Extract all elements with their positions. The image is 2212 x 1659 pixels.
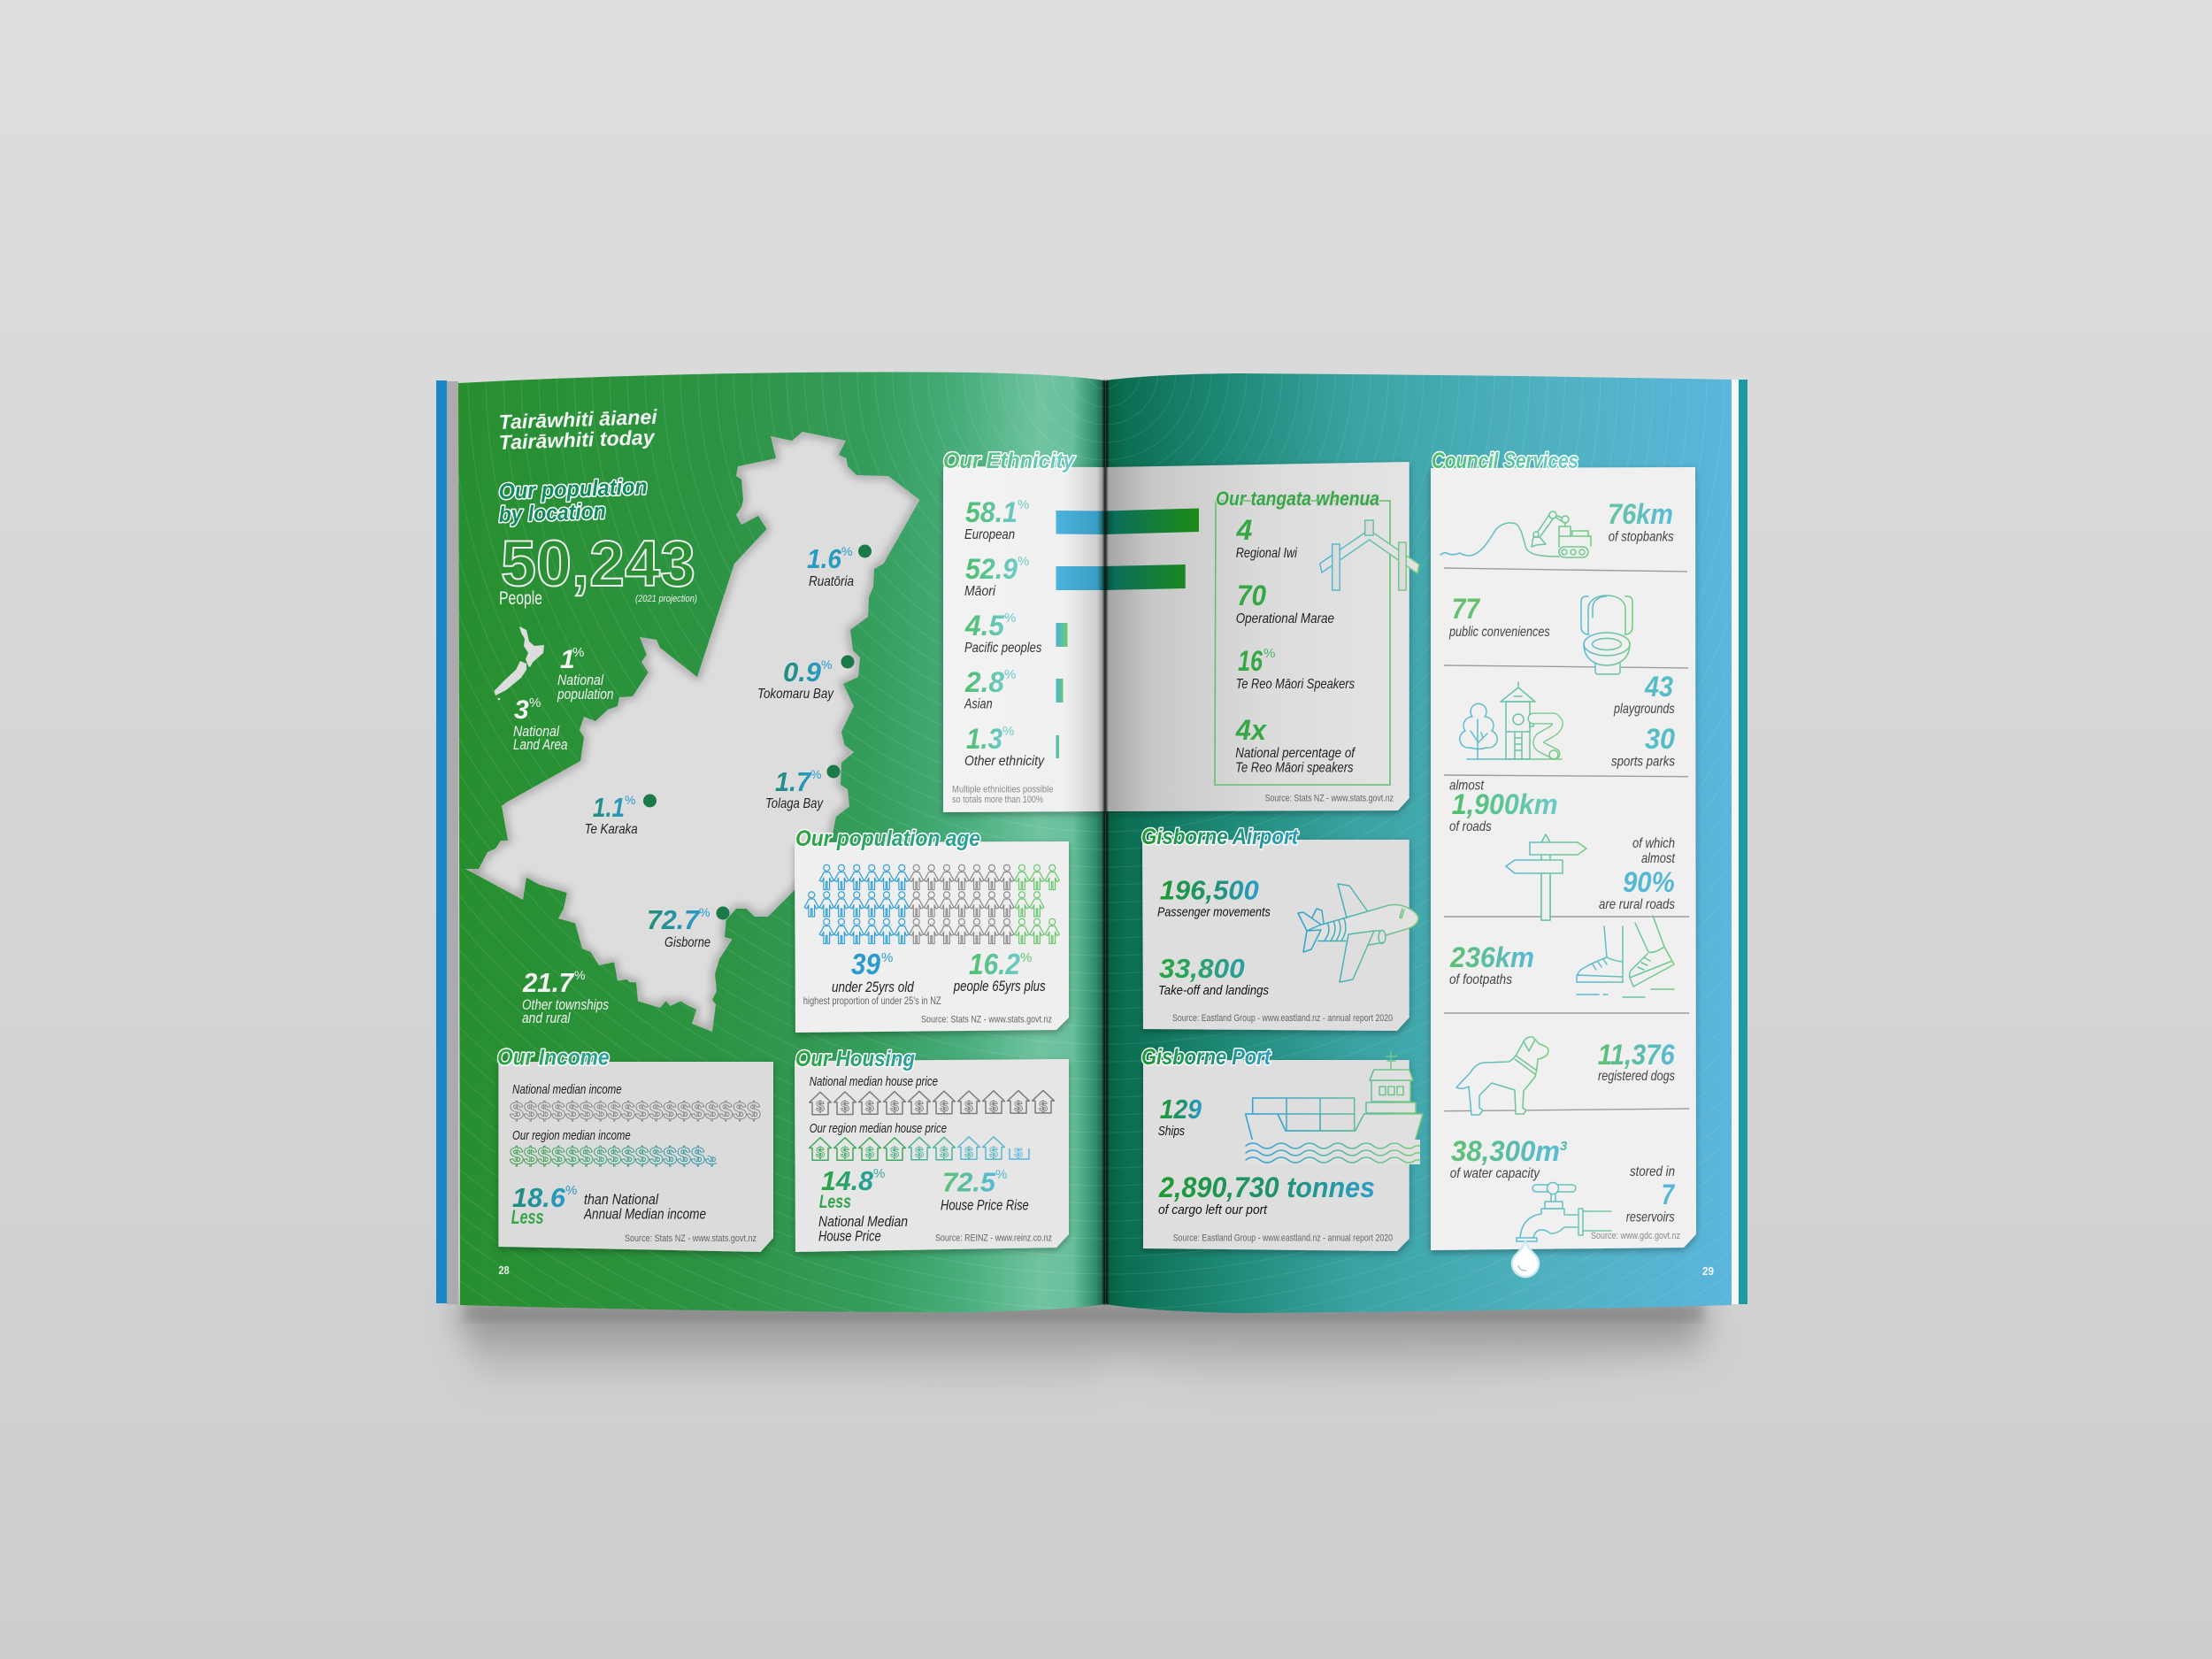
stat: registered dogs: 11,376	[1598, 1039, 1675, 1071]
stat: 4x national: Te Reo Māori speakers	[1235, 761, 1354, 776]
icon: tap	[1517, 1182, 1611, 1241]
source: Source: Stats NZ - www.stats.govt.nz	[625, 1233, 757, 1244]
icon: shoes	[1577, 916, 1674, 997]
location: Gisborne: %	[699, 905, 710, 919]
stat: 39%: 39	[851, 948, 881, 980]
stat: stopbanks: 76km	[1608, 498, 1673, 530]
people pictogram	[804, 864, 1059, 944]
stat: roads: 1,900km	[1452, 788, 1558, 820]
stat: other townships	[522, 967, 609, 1026]
icon: excavator and stopbank	[1440, 511, 1591, 557]
icon: water drop	[1512, 1241, 1539, 1277]
stat: other townships: and rural	[522, 1010, 571, 1026]
stat: 4 iwi: Regional Iwi	[1236, 546, 1297, 561]
heading: Our tangata whenua	[1216, 488, 1379, 510]
stat: 4x national	[1235, 714, 1356, 776]
stat: 4x national: National percentage of	[1235, 746, 1356, 761]
stat: sports parks	[1611, 723, 1675, 770]
stat: 18.6% less: %	[565, 1183, 577, 1198]
region median income	[510, 1130, 717, 1166]
stat: cargo: of cargo left our port	[1158, 1202, 1268, 1217]
location: Tolaga Bay	[765, 764, 841, 811]
stat: cargo	[1158, 1171, 1375, 1217]
region median house price: Our region median house price	[810, 1122, 947, 1136]
stat: 16.2%: 16.2	[969, 948, 1021, 980]
stat: 18.6% less: Less	[511, 1206, 544, 1228]
location: Gisborne	[647, 904, 729, 950]
stat: water capacity: of water capacity	[1450, 1166, 1540, 1181]
stat: public conveniences: public conveniences	[1448, 625, 1550, 640]
row: Pacific peoples 4.5%: 4.5	[964, 610, 1005, 641]
stat: water capacity: 3	[1560, 1139, 1568, 1154]
stat: 70 marae	[1236, 580, 1334, 626]
stat: passenger movements: 196,500	[1160, 875, 1259, 906]
frame	[1215, 501, 1390, 785]
stat: reservoirs: reservoirs	[1626, 1210, 1675, 1225]
row: European 58.1%: %	[1018, 497, 1029, 512]
national median house price: $$$$$$$$$$	[816, 1098, 1048, 1115]
source: Source: Stats NZ - www.stats.govt.nz	[921, 1015, 1052, 1025]
stat: playgrounds: 43	[1644, 671, 1673, 703]
stat: roads	[1449, 779, 1558, 834]
stat: reservoirs	[1626, 1164, 1676, 1225]
stat: 72.5% rise: 72.5	[942, 1167, 996, 1198]
heading: Our Housing	[795, 1047, 915, 1071]
stat: 72.5% rise: %	[995, 1167, 1007, 1182]
location: Te Karaka: %	[625, 793, 635, 807]
national median house price: National median house price	[810, 1075, 938, 1089]
stat: 39%: under 25yrs old	[832, 979, 914, 995]
stat: rural roads: are rural roads	[1599, 897, 1675, 912]
national median income: National median income	[512, 1083, 622, 1097]
location: Ruatōria	[807, 543, 872, 589]
row: Māori 52.9%: %	[1018, 554, 1029, 569]
stat: 16% speakers: %	[1263, 646, 1275, 661]
stat: 14.8% less: %	[873, 1166, 885, 1181]
left page background	[458, 372, 1105, 1312]
stat: footpaths: 236km	[1449, 941, 1534, 973]
location: Ruatōria: 1.6	[807, 543, 842, 574]
region median house price: $$$$$$$$	[816, 1144, 998, 1161]
source: Source: Eastland Group - www.eastland.nz - annual report 2020	[1173, 1233, 1393, 1244]
stat: 14.8% less: 14.8	[821, 1165, 874, 1196]
row: Māori 52.9%	[964, 553, 1186, 599]
stat: stopbanks: of stopbanks	[1609, 530, 1674, 545]
stat: 1% national population: population	[557, 686, 614, 703]
stat: footpaths: of footpaths	[1449, 972, 1512, 987]
stat: reservoirs: 7	[1662, 1179, 1676, 1210]
icon: New Zealand	[494, 626, 544, 700]
heading: Tairāwhiti today: Tairāwhiti āianei	[498, 405, 658, 434]
stat: footpaths	[1449, 941, 1534, 987]
heading: Council Services	[1432, 449, 1578, 473]
stat: 70 marae: 70	[1237, 580, 1266, 611]
stat: 3% national land area: Land Area	[513, 736, 568, 753]
source: Source: www.gdc.govt.nz	[1591, 1231, 1680, 1241]
region median income: Our region median income	[512, 1129, 631, 1143]
stat: passenger movements: Passenger movements	[1157, 905, 1271, 920]
spine edges left	[436, 380, 458, 1304]
footnote: so totals more than 100%	[952, 795, 1043, 805]
page number 29: 29	[1702, 1264, 1714, 1278]
stat: public conveniences: 77	[1452, 593, 1481, 625]
stat: 1% national population: 1	[560, 645, 575, 674]
national median house price	[810, 1075, 1054, 1115]
row: Māori 52.9%: Māori	[964, 584, 995, 599]
stat: 39%	[803, 948, 941, 1007]
row: Asian 2.8%: %	[1004, 667, 1016, 682]
heading: Tairāwhiti today	[498, 405, 658, 454]
stat: sports parks: sports parks	[1611, 755, 1675, 770]
location: Tolaga Bay: %	[810, 767, 821, 781]
stat: 14.8% less: Less	[819, 1192, 851, 1212]
stat: 4x national: 4x	[1235, 714, 1267, 746]
stat: stopbanks	[1608, 498, 1674, 545]
icon: toilet	[1581, 595, 1632, 674]
page number 28: 28	[498, 1263, 510, 1277]
stat: 4 iwi: 4	[1235, 514, 1253, 546]
stat: other townships: Other townships	[522, 996, 609, 1013]
stat: 14.8% less: House Price	[818, 1229, 881, 1245]
icon: container ship	[1246, 1051, 1423, 1164]
stat: 3% national land area: National	[513, 723, 560, 740]
stat: roads: of roads	[1449, 819, 1492, 834]
stat: 16.2%	[953, 948, 1046, 995]
page edges right	[1732, 380, 1747, 1304]
row: Asian 2.8%: Asian	[964, 697, 993, 712]
location: Te Karaka: 1.1	[593, 792, 625, 823]
panel: our population age	[795, 826, 1069, 1033]
location: Tokomaru Bay: %	[821, 657, 832, 672]
total population 50,243: 50,243	[501, 528, 695, 600]
heading: Our population age	[795, 826, 980, 851]
stat: registered dogs	[1598, 1039, 1675, 1084]
region median house price	[810, 1122, 1029, 1161]
stat: other townships: 21.7	[522, 967, 575, 998]
row: Other ethnicity 1.3%: 1.3	[966, 723, 1002, 755]
region median income: $	[705, 1142, 719, 1170]
icon: aeroplane	[1298, 884, 1418, 982]
stat: cargo: 2,890,730 tonnes	[1158, 1171, 1375, 1203]
stat: 39%: highest proportion of under 25's in NZ	[803, 995, 941, 1007]
heading: Our Ethnicity	[943, 449, 1076, 473]
row: Pacific peoples 4.5%: %	[1004, 611, 1016, 626]
stat: 16.2%: people 65yrs plus	[953, 978, 1046, 995]
book shadow	[456, 1302, 1703, 1390]
stat: public conveniences	[1448, 593, 1550, 640]
stat: 72.5% rise	[941, 1167, 1029, 1214]
stat: 3% national land area: %	[529, 695, 541, 710]
panel: council services	[1431, 449, 1696, 1277]
stat: 18.6% less: than National	[584, 1191, 659, 1208]
row: European 58.1%: European	[964, 527, 1015, 542]
stat: 18.6% less: Annual Median income	[583, 1206, 706, 1223]
row: European 58.1%: 58.1	[965, 496, 1018, 528]
stat: 70 marae: Operational Marae	[1236, 611, 1334, 626]
row: European 58.1%	[964, 496, 1199, 542]
stat: water capacity	[1450, 1135, 1568, 1181]
footnote: Multiple ethnicities possible	[952, 785, 1053, 795]
stat: 3% national land area	[513, 695, 568, 753]
stat: ships: 129	[1160, 1094, 1202, 1125]
region median house price: $	[1014, 1144, 1023, 1161]
stat: take-off and landings	[1158, 953, 1269, 998]
stat: 39%: %	[881, 950, 893, 965]
stat: 1% national population: National	[557, 672, 604, 688]
right page background	[1106, 373, 1732, 1313]
stat: other townships: %	[574, 968, 585, 982]
stat: registered dogs: registered dogs	[1598, 1069, 1675, 1084]
location: Ruatōria: Ruatōria	[809, 574, 854, 589]
total population 50,243: People	[499, 588, 542, 609]
location: Tolaga Bay: Tolaga Bay	[765, 796, 824, 811]
row: Other ethnicity 1.3%: Other ethnicity	[964, 754, 1045, 769]
stat: 14.8% less	[818, 1165, 908, 1245]
heading: Gisborne Airport	[1141, 825, 1299, 849]
source: Source: Eastland Group - www.eastland.nz - annual report 2020	[1172, 1013, 1393, 1024]
stat: 72.5% rise: House Price Rise	[941, 1198, 1029, 1214]
stat: 16.2%: %	[1020, 950, 1032, 965]
stat: reservoirs: stored in	[1630, 1164, 1675, 1179]
gutter fold	[1104, 380, 1107, 1304]
heading: Tairāwhiti today: Tairāwhiti today	[498, 426, 656, 454]
icon: marae	[1320, 520, 1419, 590]
stat: 16% speakers: 16	[1238, 645, 1263, 677]
stat: 14.8% less: National Median	[818, 1214, 908, 1230]
panel: our ethnicity (spans gutter)	[943, 449, 1409, 812]
total population 50,243: (2021 projection)	[635, 594, 697, 604]
stat: rural roads: almost	[1641, 851, 1675, 866]
stat: take-off and landings: Take-off and landings	[1158, 983, 1269, 998]
row: Pacific peoples 4.5%: Pacific peoples	[964, 641, 1041, 656]
stat: 18.6% less	[511, 1182, 706, 1228]
stat: rural roads	[1599, 836, 1675, 912]
panel: our tangata whenua	[1215, 488, 1419, 785]
row: Other ethnicity 1.3%	[964, 723, 1059, 769]
location: Tolaga Bay: 1.7	[775, 766, 812, 797]
stat: 1% national population: %	[572, 645, 584, 660]
footnote	[952, 785, 1053, 805]
stat: ships	[1158, 1094, 1202, 1139]
heading: Our population by location: by location	[498, 499, 606, 527]
heading: Gisborne Port	[1141, 1045, 1271, 1070]
panel: gisborne port	[1141, 1045, 1423, 1251]
source: Source: REINZ - www.reinz.co.nz	[935, 1233, 1052, 1244]
icon: signpost	[1506, 834, 1586, 920]
stat: 4 iwi	[1235, 514, 1297, 561]
heading: Our population by location	[498, 474, 648, 527]
row: Asian 2.8%	[964, 666, 1064, 712]
location: Gisborne: Gisborne	[664, 935, 710, 950]
stat: take-off and landings: 33,800	[1159, 953, 1245, 984]
icon: playground	[1460, 682, 1562, 759]
stat: playgrounds	[1613, 671, 1675, 717]
stat: 16% speakers: Te Reo Māori Speakers	[1236, 677, 1355, 692]
stat: playgrounds: playgrounds	[1613, 702, 1675, 717]
row dividers	[1444, 568, 1689, 1111]
stat: rural roads: 90%	[1623, 866, 1675, 898]
row: Pacific peoples 4.5%	[964, 610, 1067, 656]
stat: passenger movements	[1157, 875, 1271, 920]
stat: 3% national land area: 3	[514, 695, 529, 725]
stat: 18.6% less: 18.6	[512, 1182, 566, 1213]
location: Gisborne: 72.7	[647, 904, 701, 935]
location: Tokomaru Bay: 0.9	[783, 657, 822, 687]
region median income: $$$$$$$$$$$$$$	[510, 1142, 705, 1170]
stat: ships: Ships	[1158, 1124, 1185, 1139]
row: Other ethnicity 1.3%: %	[1002, 724, 1014, 739]
source: Source: Stats NZ - www.stats.govt.nz	[1265, 794, 1394, 804]
heading: Our population by location: Our population	[498, 474, 648, 504]
panel: our housing	[795, 1047, 1069, 1252]
location: Tokomaru Bay: Tokomaru Bay	[757, 687, 834, 702]
stat: sports parks: 30	[1645, 723, 1675, 755]
national median income	[510, 1083, 761, 1125]
national median income: $$$$$$$$$$$$$$$$$$	[510, 1097, 761, 1125]
row: Asian 2.8%: 2.8	[964, 666, 1004, 698]
stat: 16% speakers	[1236, 645, 1355, 692]
panel: our income	[497, 1046, 773, 1252]
stat: water capacity: 38,300m	[1451, 1135, 1560, 1167]
stat: roads: almost	[1449, 779, 1484, 794]
location: Te Karaka	[585, 792, 657, 837]
stat: 1% national population	[557, 645, 614, 703]
heading: Our Income	[497, 1046, 610, 1071]
location: Ruatōria: %	[841, 544, 852, 558]
row: Māori 52.9%: 52.9	[965, 553, 1018, 585]
panel: gisborne airport	[1141, 825, 1418, 1031]
location: Tokomaru Bay	[757, 655, 855, 702]
stat: rural roads: of which	[1632, 836, 1675, 851]
map of Tairāwhiti region	[465, 432, 920, 1032]
icon: dog	[1456, 1037, 1548, 1115]
location: Te Karaka: Te Karaka	[585, 822, 638, 837]
